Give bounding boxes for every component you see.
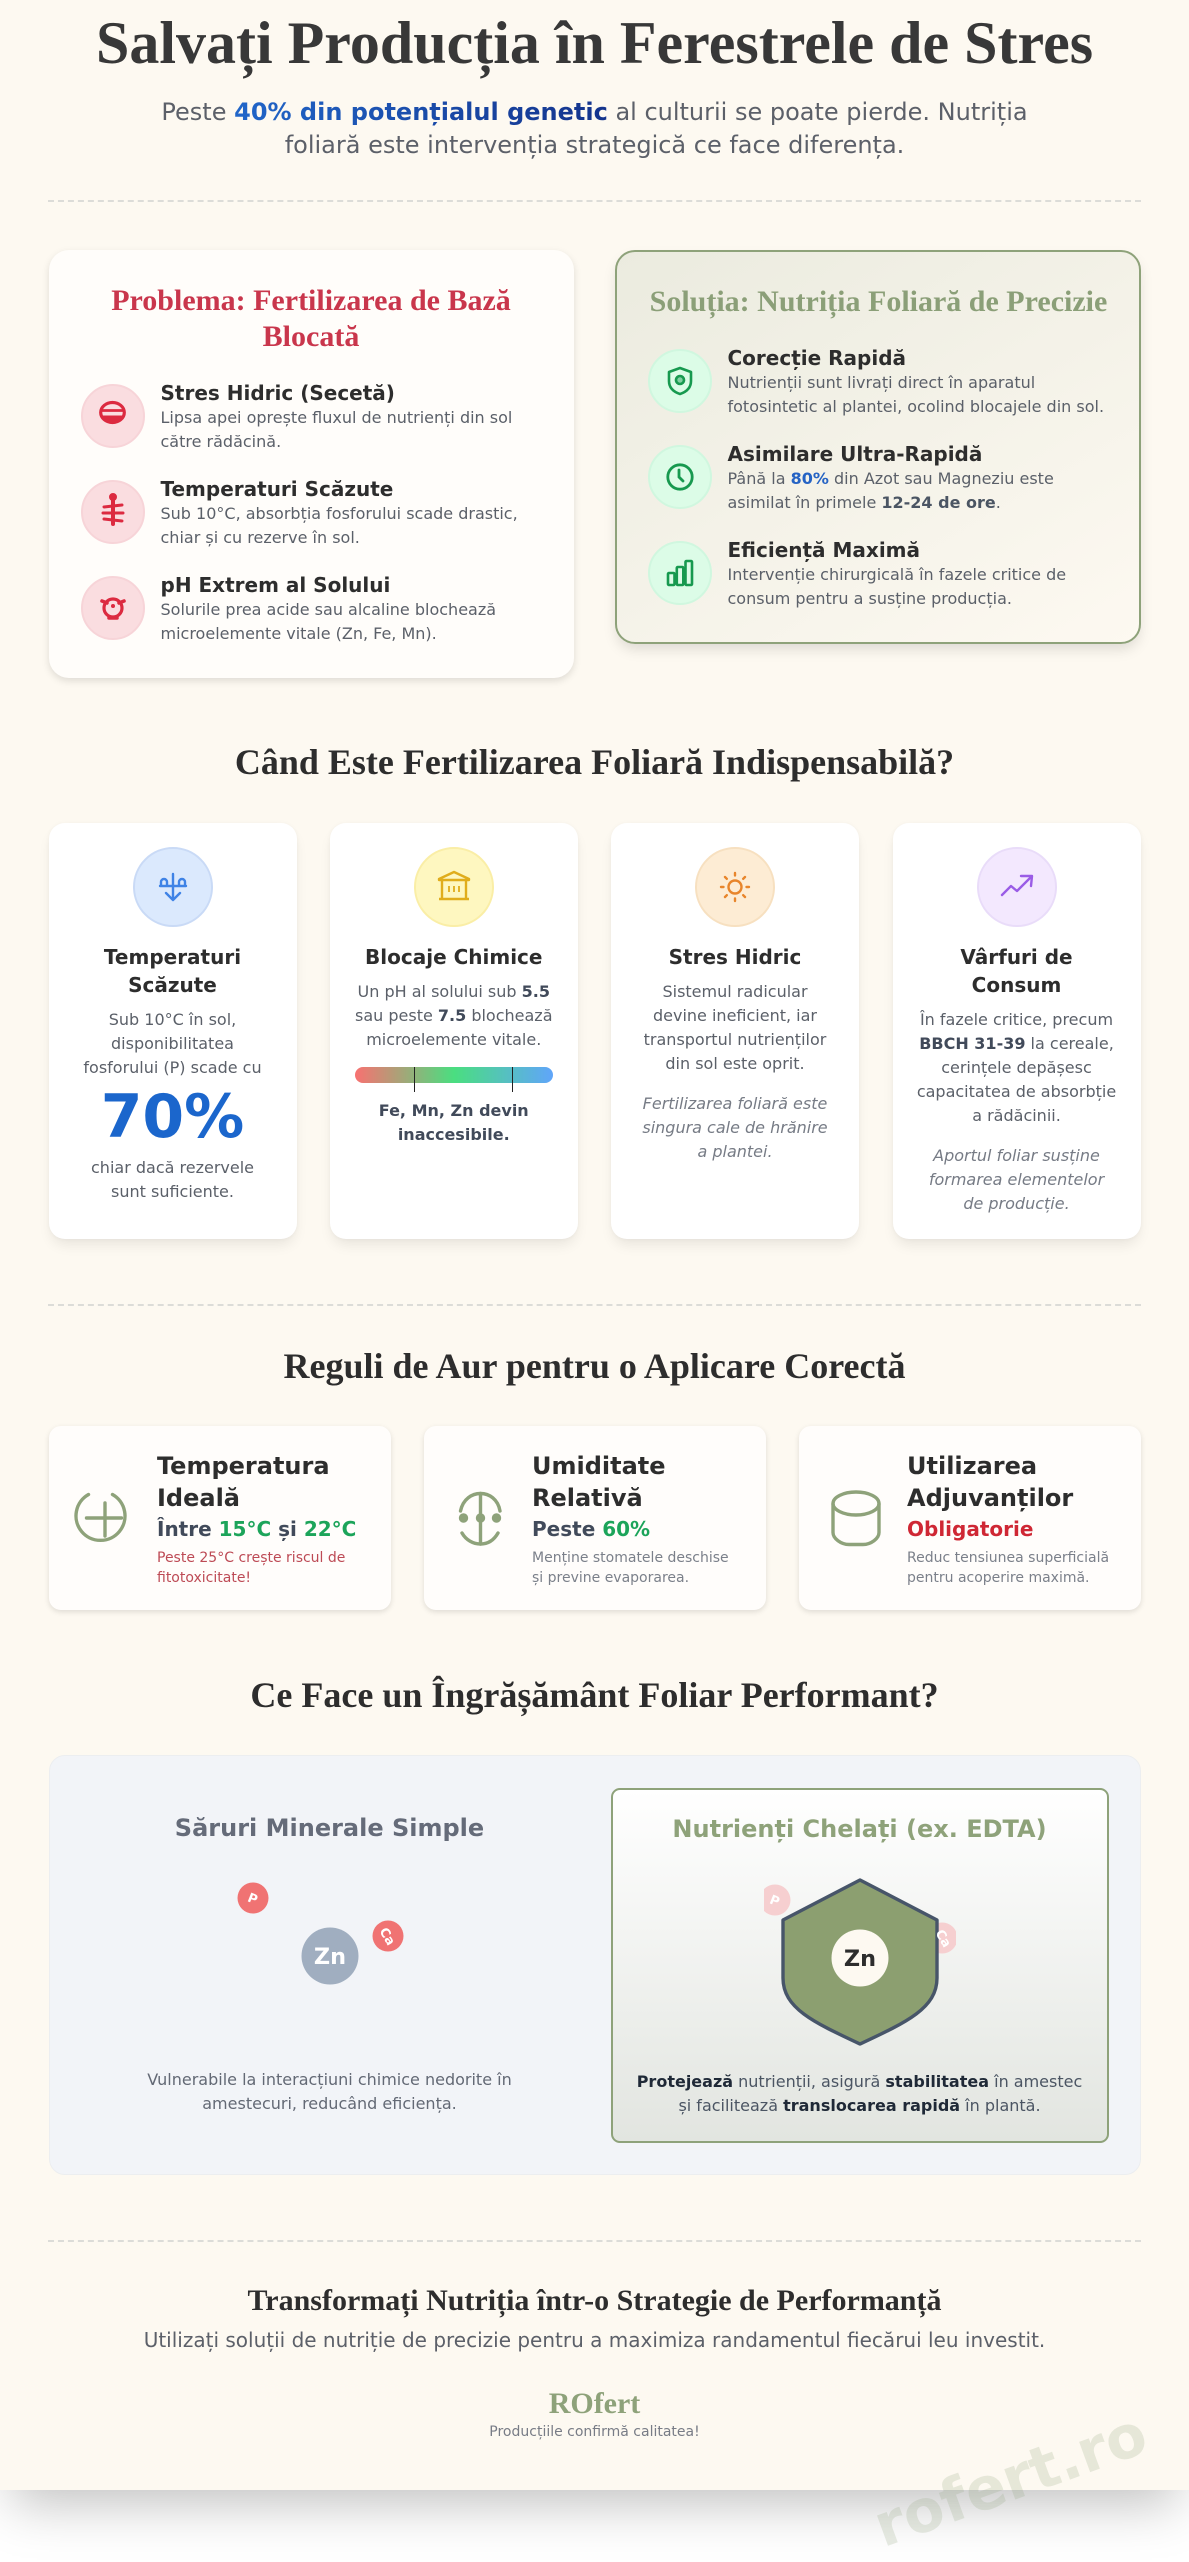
panel: solution <box>614 250 1141 644</box>
diagram: protected zinc shield: Ca <box>931 1927 953 1950</box>
solution item: max efficiency: Eficiență Maximă <box>728 538 920 562</box>
icon: shield <box>648 349 712 413</box>
stat: 70%: 70% <box>101 1082 244 1152</box>
icon: humidity <box>458 1492 502 1546</box>
problem heading: Problema: Fertilizarea de Bază <box>111 284 511 317</box>
icon: clock <box>648 445 712 509</box>
card: consumption peaks: a rădăcinii. <box>972 1106 1061 1124</box>
tagline: Producțiile confirmă calitatea! <box>489 2424 700 2440</box>
rule card: adjuvants: Reduc tensiunea superficială <box>907 1550 1109 1566</box>
icon: drought <box>80 384 144 448</box>
card: consumption peaks <box>892 823 1140 1239</box>
rule card: adjuvants: Utilizarea <box>907 1452 1037 1480</box>
rule card: adjuvants <box>798 1426 1140 1610</box>
icon: pH <box>80 576 144 640</box>
icon: trend up <box>976 847 1056 927</box>
simple salts description <box>147 2070 512 2113</box>
pH gradient bar <box>355 1067 553 1092</box>
rule card: humidity: Peste 60% <box>532 1517 650 1541</box>
rule card: temperature: fitotoxicitate! <box>157 1570 251 1586</box>
rule card: temperature <box>48 1426 390 1610</box>
problem item: low temperatures <box>81 476 518 547</box>
icon: cold <box>80 480 144 544</box>
problem item: water stress: Lipsa apei oprește fluxul de nutrienți din sol <box>160 408 512 427</box>
simple salts description: Vulnerabile la interacțiuni chimice nedorite în <box>147 2070 512 2088</box>
subtitle: foliară este intervenția strategică ce face diferența. <box>285 131 904 159</box>
rule card: humidity: și previne evaporarea. <box>532 1570 689 1586</box>
problem item: water stress: către rădăcină. <box>160 432 281 451</box>
solution item: max efficiency: Intervenție chirurgicală în fazele critice de <box>728 565 1066 584</box>
problem item: low temperatures: Sub 10°C, absorbția fosforului scade drastic, <box>160 504 518 523</box>
section heading: performance: Ce Face un Îngrășământ Foliar Performant? <box>250 1674 939 1714</box>
card: chemical blockages: inaccesibile. <box>398 1124 510 1144</box>
card: consumption peaks: Aportul foliar susține <box>933 1146 1100 1164</box>
rule card: adjuvants: Obligatorie <box>907 1517 1033 1541</box>
solution heading: Soluția: Nutriția Foliară de Precizie <box>650 285 1107 318</box>
card: water stress: Fertilizarea foliară este <box>643 1094 827 1112</box>
chelated description <box>637 2072 1082 2114</box>
card: water stress: transportul nutrienților <box>644 1030 826 1048</box>
card: water stress <box>611 823 859 1239</box>
chelated description: Protejează nutrienții, asigură stabilitatea în amestec <box>637 2072 1082 2090</box>
problem item: extreme pH: microelemente vitale (Zn, Fe, Mn). <box>160 624 437 643</box>
card: chemical blockages: Blocaje Chimice <box>365 945 542 969</box>
rule card: humidity: Relativă <box>532 1484 643 1512</box>
rule card: humidity <box>424 1426 766 1610</box>
problem item: water stress <box>81 380 512 451</box>
rule card: adjuvants: Adjuvanților <box>907 1484 1073 1512</box>
card: chemical blockages: sau peste 7.5 blochează <box>355 1006 552 1024</box>
card: low temperatures <box>48 823 296 1239</box>
solution item: rapid correction: Nutrienții sunt livrați direct în aparatul <box>728 373 1035 392</box>
chelated description: și facilitează translocarea rapidă în plantă. <box>678 2096 1041 2114</box>
card: low temperatures: Sub 10°C în sol, <box>109 1010 236 1028</box>
card: chemical blockages <box>330 823 578 1239</box>
solution item: rapid correction: Corecție Rapidă <box>728 346 906 370</box>
card: water stress: din sol este oprit. <box>665 1054 805 1072</box>
rule card: temperature: Peste 25°C crește riscul de <box>157 1550 345 1566</box>
card: chemical blockages: Fe, Mn, Zn devin <box>379 1100 529 1120</box>
problem item: low temperatures: Temperaturi Scăzute <box>160 476 393 500</box>
card: water stress: Sistemul radicular <box>662 982 808 1000</box>
icon: sun <box>695 847 775 927</box>
card: consumption peaks: formarea elementelor <box>929 1170 1104 1188</box>
card: water stress: singura cale de hrănire <box>642 1118 828 1136</box>
diagram: unprotected zinc: Zn <box>313 1944 346 1970</box>
rule card: temperature: Între 15°C și 22°C <box>157 1517 356 1541</box>
icon: cold roots <box>132 847 212 927</box>
problem item: low temperatures: chiar și cu rezerve în sol. <box>160 528 360 547</box>
solution item: max efficiency <box>648 538 1066 608</box>
card: low temperatures: Temperaturi <box>104 945 241 969</box>
footer text: Utilizați soluții de nutriție de precizie pentru a maximiza randamentul fiecărui leu investit. <box>144 2328 1045 2352</box>
diagram: protected zinc shield: Zn <box>843 1946 876 1972</box>
simple salts heading: Săruri Minerale Simple <box>175 1814 484 1842</box>
rule card: humidity: Umiditate <box>532 1452 666 1480</box>
card: consumption peaks: Vârfuri de <box>960 945 1073 969</box>
rule card: adjuvants: pentru acoperire maximă. <box>907 1570 1090 1586</box>
chelated nutrients column <box>610 1788 1108 2143</box>
rule card: temperature: Temperatura <box>157 1452 330 1480</box>
section heading: golden rules: Reguli de Aur pentru o Aplicare Corectă <box>284 1346 905 1386</box>
card: consumption peaks: de producție. <box>963 1194 1070 1212</box>
solution item: rapid correction <box>648 346 1104 416</box>
icon: bars <box>648 541 712 605</box>
card: water stress: Stres Hidric <box>669 945 801 969</box>
diagram: unprotected zinc: P <box>245 1891 259 1908</box>
card: low temperatures: disponibilitatea <box>111 1034 234 1052</box>
chelated heading: Nutrienți Chelați (ex. EDTA) <box>672 1815 1047 1843</box>
title: Salvați Producția în Ferestrele de Stres <box>96 10 1093 76</box>
card: low temperatures: Scăzute <box>128 973 217 997</box>
solution item: max efficiency: consum pentru a susține producția. <box>728 589 1012 608</box>
problem item: extreme pH: pH Extrem al Solului <box>160 572 390 596</box>
diagram: unprotected zinc: Ca <box>375 1925 397 1948</box>
brand logo: ROfert <box>549 2386 640 2420</box>
rule card: humidity: Menține stomatele deschise <box>532 1550 729 1566</box>
problem item: extreme pH: Solurile prea acide sau alcaline blochează <box>160 600 496 619</box>
subtitle <box>161 98 1028 159</box>
section heading: when: Când Este Fertilizarea Foliară Indispensabilă? <box>235 742 954 782</box>
diagram: protected zinc shield <box>764 1878 956 2046</box>
problem item: extreme pH <box>81 572 496 643</box>
card: consumption peaks: Consum <box>972 973 1061 997</box>
problem heading <box>111 284 511 353</box>
solution item: fast uptake: Până la 80% din Azot sau Magneziu este <box>728 469 1054 488</box>
card: low temperatures: sunt suficiente. <box>111 1182 234 1200</box>
panel: problem <box>48 250 574 678</box>
diagram: protected zinc shield: P <box>767 1893 781 1910</box>
problem heading: Blocată <box>263 320 359 353</box>
icon: cylinder <box>831 1490 881 1546</box>
icon: bank <box>414 847 494 927</box>
card: chemical blockages: microelemente vitale. <box>366 1030 541 1048</box>
card: chemical blockages: Un pH al solului sub 5.5 <box>358 982 550 1000</box>
footer heading: Transformați Nutriția într-o Strategie de Performanță <box>248 2284 941 2316</box>
card: low temperatures: chiar dacă rezervele <box>91 1158 254 1176</box>
diagram: unprotected zinc <box>238 1882 404 1984</box>
rule card: temperature: Ideală <box>157 1484 240 1512</box>
panel: comparison <box>48 1755 1141 2175</box>
card: consumption peaks: În fazele critice, precum <box>920 1010 1113 1028</box>
card: water stress: devine ineficient, iar <box>653 1006 817 1024</box>
problem item: water stress: Stres Hidric (Secetă) <box>160 380 395 404</box>
solution item: rapid correction: fotosintetic al plantei, ocolind blocajele din sol. <box>728 397 1104 416</box>
solution item: fast uptake <box>648 442 1054 512</box>
card: consumption peaks: capacitatea de absorbție <box>917 1082 1116 1100</box>
card: low temperatures: fosforului (P) scade cu <box>83 1058 262 1076</box>
subtitle: Peste 40% din potențialul genetic al culturii se poate pierde. Nutriția <box>161 98 1028 126</box>
watermark: rofert.ro <box>865 2398 1156 2561</box>
icon: temperature <box>74 1492 127 1542</box>
solution item: fast uptake: asimilat în primele 12-24 de ore. <box>728 493 1001 512</box>
card: consumption peaks: BBCH 31-39 la cereale, <box>919 1034 1114 1052</box>
card: water stress: a plantei. <box>697 1142 773 1160</box>
solution item: fast uptake: Asimilare Ultra-Rapidă <box>728 442 982 466</box>
simple salts description: amestecuri, reducând eficiența. <box>202 2094 457 2112</box>
simple salts column <box>147 1814 512 2113</box>
card: consumption peaks: cerințele depășesc <box>941 1058 1092 1076</box>
